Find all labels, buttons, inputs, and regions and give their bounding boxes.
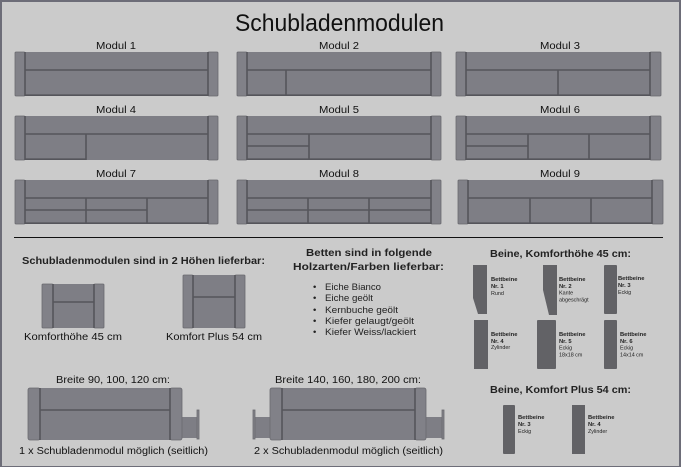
sofa width 140-200 cm: Breite 140, 160, 180, 200 cm:: [275, 375, 421, 386]
wood types list: •: [313, 316, 316, 327]
leg 6: Nr. 6: [620, 339, 633, 345]
module 8: Modul 8: [319, 169, 359, 180]
leg 2: Kante: [559, 290, 573, 296]
leg 5: [537, 320, 586, 369]
leg 3: [604, 265, 645, 314]
leg 4: Bettbeine: [491, 332, 518, 338]
leg 6: Eckig: [620, 346, 633, 352]
plus leg 4: Nr. 4: [588, 422, 601, 428]
wood types list: Eiche geölt: [325, 293, 373, 304]
legs heading 54 cm: Beine, Komfort Plus 54 cm:: [490, 385, 631, 396]
leg 6: 14x14 cm: [620, 352, 644, 358]
plus leg 4: Bettbeine: [588, 415, 615, 421]
module 4: [15, 105, 218, 160]
leg 3: Eckig: [618, 290, 631, 296]
sofa width 90-120 cm: Breite 90, 100, 120 cm:: [56, 375, 170, 386]
sofa width 90-120 cm: 1 x Schubladenmodul möglich (seitlich): [19, 446, 208, 457]
wood types heading: Betten sind in folgende: [306, 248, 432, 259]
module 6: Modul 6: [540, 105, 580, 116]
leg 4: Zylinder: [491, 345, 510, 351]
wood types list: Eiche Bianco: [325, 282, 381, 293]
plus leg 4: Zylinder: [588, 429, 607, 435]
comfort plus 54 cm: [166, 275, 262, 343]
module 3: Modul 3: [540, 41, 580, 52]
module 7: [15, 169, 218, 224]
leg 1: [473, 265, 518, 314]
leg 5: Nr. 5: [559, 339, 572, 345]
plus leg 3: Nr. 3: [518, 422, 531, 428]
plus leg 3: Bettbeine: [518, 415, 545, 421]
wood types list: Kiefer Weiss/lackiert: [325, 327, 416, 338]
comfort plus 54 cm: Komfort Plus 54 cm: [166, 332, 262, 343]
plus leg 3: [503, 405, 545, 454]
module 1: [15, 41, 218, 96]
wood types list: •: [313, 305, 316, 316]
module 6: [456, 105, 661, 160]
plus leg 4: [572, 405, 615, 454]
plus leg 3: Eckig: [518, 429, 531, 435]
leg 3: Nr. 3: [618, 283, 631, 289]
legs heading 45 cm: Beine, Komforthöhe 45 cm:: [490, 249, 631, 260]
module 5: [237, 105, 441, 160]
module 9: Modul 9: [540, 169, 580, 180]
leg 1: Bettbeine: [491, 277, 518, 283]
wood types heading: [293, 248, 444, 273]
module 9: [458, 169, 663, 224]
leg 2: abgeschrägt: [559, 298, 589, 304]
wood types list: •: [313, 327, 316, 338]
comfort height 45 cm: [24, 284, 122, 343]
leg 1: Rund: [491, 291, 504, 297]
sofa width 90-120 cm: [19, 375, 208, 457]
leg 1: Nr. 1: [491, 284, 504, 290]
module 2: [237, 41, 441, 96]
leg 4: Nr. 4: [491, 339, 504, 345]
leg 6: Bettbeine: [620, 332, 647, 338]
module 8: [237, 169, 441, 224]
wood types heading: Holzarten/Farben lieferbar:: [293, 262, 444, 273]
module 7: Modul 7: [96, 169, 136, 180]
leg 5: Eckig: [559, 346, 572, 352]
module 2: Modul 2: [319, 41, 359, 52]
wood types list: •: [313, 293, 316, 304]
heights heading: Schubladenmodulen sind in 2 Höhen lieferbar:: [22, 256, 265, 267]
leg 2: Bettbeine: [559, 277, 586, 283]
wood types list: Kiefer gelaugt/geölt: [325, 316, 414, 327]
module 3: [456, 41, 661, 96]
leg 6: [604, 320, 647, 369]
leg 5: 18x18 cm: [559, 352, 583, 358]
sofa width 140-200 cm: [253, 375, 444, 457]
leg 4: [474, 320, 518, 369]
leg 2: Nr. 2: [559, 284, 572, 290]
wood types list: Kernbuche geölt: [325, 305, 398, 316]
leg 5: Bettbeine: [559, 332, 586, 338]
wood types list: •: [313, 282, 316, 293]
module 5: Modul 5: [319, 105, 359, 116]
module 4: Modul 4: [96, 105, 136, 116]
module 1: Modul 1: [96, 41, 136, 52]
title: Schubladenmodulen: [235, 10, 444, 37]
comfort height 45 cm: Komforthöhe 45 cm: [24, 332, 122, 343]
wood types list: [313, 282, 416, 338]
leg 3: Bettbeine: [618, 276, 645, 282]
sofa width 140-200 cm: 2 x Schubladenmodul möglich (seitlich): [254, 446, 443, 457]
leg 2: [543, 265, 589, 315]
